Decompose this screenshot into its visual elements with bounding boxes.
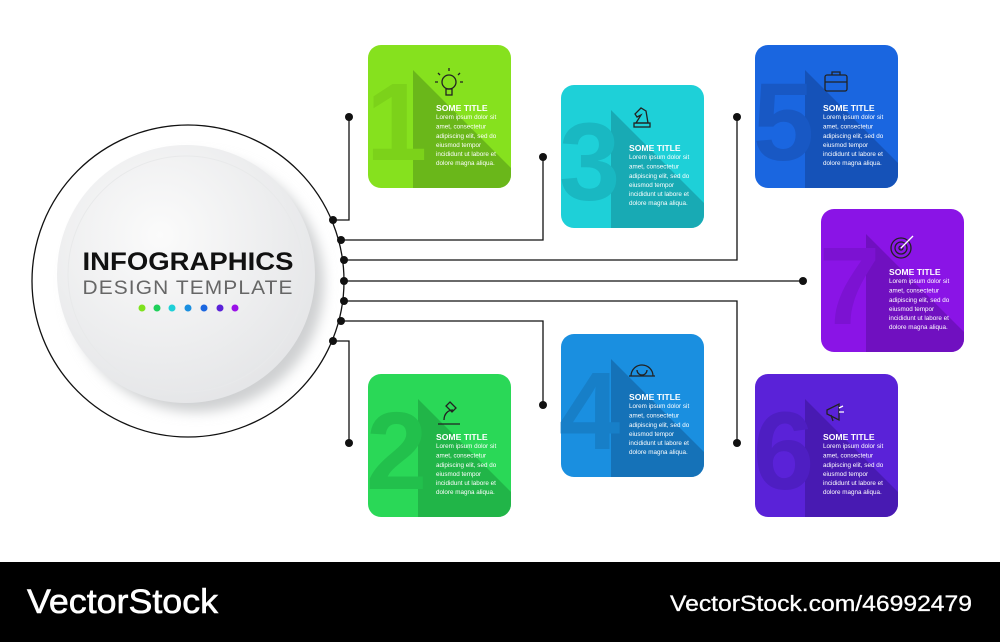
box 5: amet, consectetur [823, 124, 873, 130]
footer bar [0, 562, 1000, 642]
box 3: amet, consectetur [629, 164, 679, 170]
box 7: dolore magna aliqua. [889, 324, 948, 331]
box 4: 4 [559, 350, 620, 473]
box 6: 6 [753, 390, 814, 513]
box 4: incididunt ut labore et [629, 440, 689, 447]
box 1: eiusmod tempor [436, 142, 481, 149]
box 2: amet, consectetur [436, 452, 486, 460]
box 6: amet, consectetur [823, 452, 873, 460]
box 1: SOME TITLE [436, 103, 488, 113]
box 6: Lorem ipsum dolor sit [823, 443, 883, 450]
box 5: dolore magna aliqua. [823, 160, 882, 167]
box 5: SOME TITLE [823, 103, 875, 113]
box 2: 2 [366, 390, 427, 513]
connector lines [333, 117, 803, 443]
box 5: 5 [753, 61, 814, 184]
box 3: SOME TITLE [629, 143, 681, 153]
box 6: SOME TITLE [823, 432, 875, 442]
box 4: dolore magna aliqua. [629, 449, 688, 456]
color dots [138, 304, 238, 312]
box 4: adipiscing elit, sed do [629, 422, 690, 429]
icon: helmet [629, 365, 655, 376]
box 4: Lorem ipsum dolor sit [629, 403, 689, 410]
icon: lightbulb [435, 68, 463, 95]
icon: briefcase [825, 72, 847, 91]
box 2 [366, 374, 511, 517]
box 7: SOME TITLE [889, 267, 941, 277]
title: DESIGN TEMPLATE [82, 278, 294, 299]
box 1: amet, consectetur [436, 124, 486, 130]
box 1 [366, 45, 511, 188]
box 4 [559, 334, 704, 477]
box 7: incididunt ut labore et [889, 315, 949, 322]
box 3: incididunt ut labore et [629, 191, 689, 198]
box 5: adipiscing elit, sed do [823, 133, 884, 140]
box 6 [753, 374, 898, 517]
box 2: adipiscing elit, sed do [436, 462, 497, 469]
box 2: Lorem ipsum dolor sit [436, 443, 496, 450]
box 3: Lorem ipsum dolor sit [629, 154, 689, 161]
box 2: SOME TITLE [436, 432, 488, 442]
box 5: incididunt ut labore et [823, 151, 883, 158]
box 3: 3 [559, 101, 620, 224]
title [82, 248, 294, 299]
footer bar: VectorStock [27, 583, 219, 621]
main circle [32, 125, 344, 437]
box 1: dolore magna aliqua. [436, 160, 495, 167]
box 1: Lorem ipsum dolor sit [436, 114, 496, 121]
icon: microscope [438, 402, 460, 424]
box 4: amet, consectetur [629, 412, 679, 420]
box 3: dolore magna aliqua. [629, 200, 688, 207]
box 7: eiusmod tempor [889, 306, 934, 313]
box 6: incididunt ut labore et [823, 480, 883, 487]
box 6: dolore magna aliqua. [823, 489, 882, 496]
icon: chess knight [634, 108, 650, 127]
box 1: incididunt ut labore et [436, 151, 496, 158]
box 7: 7 [819, 225, 880, 348]
box 3: eiusmod tempor [629, 182, 674, 189]
box 5: eiusmod tempor [823, 142, 868, 149]
icon: megaphone [827, 404, 844, 421]
box 7: Lorem ipsum dolor sit [889, 278, 949, 285]
box 7: amet, consectetur [889, 288, 939, 294]
box 5 [753, 45, 898, 188]
box 2: incididunt ut labore et [436, 480, 496, 487]
box 4: eiusmod tempor [629, 431, 674, 438]
box 5: Lorem ipsum dolor sit [823, 114, 883, 121]
box 6: eiusmod tempor [823, 471, 868, 478]
box 2: eiusmod tempor [436, 471, 481, 478]
box 6: adipiscing elit, sed do [823, 462, 884, 469]
box 4: SOME TITLE [629, 392, 681, 402]
box 2: dolore magna aliqua. [436, 489, 495, 496]
box 7 [819, 209, 964, 352]
box 3 [559, 85, 704, 228]
box 7: adipiscing elit, sed do [889, 297, 950, 304]
footer bar: VectorStock.com/46992479 [670, 591, 972, 616]
box 1: adipiscing elit, sed do [436, 133, 497, 140]
icon: target [891, 236, 913, 258]
title: INFOGRAPHICS [82, 248, 294, 276]
box 1: 1 [366, 61, 427, 184]
box 3: adipiscing elit, sed do [629, 173, 690, 180]
